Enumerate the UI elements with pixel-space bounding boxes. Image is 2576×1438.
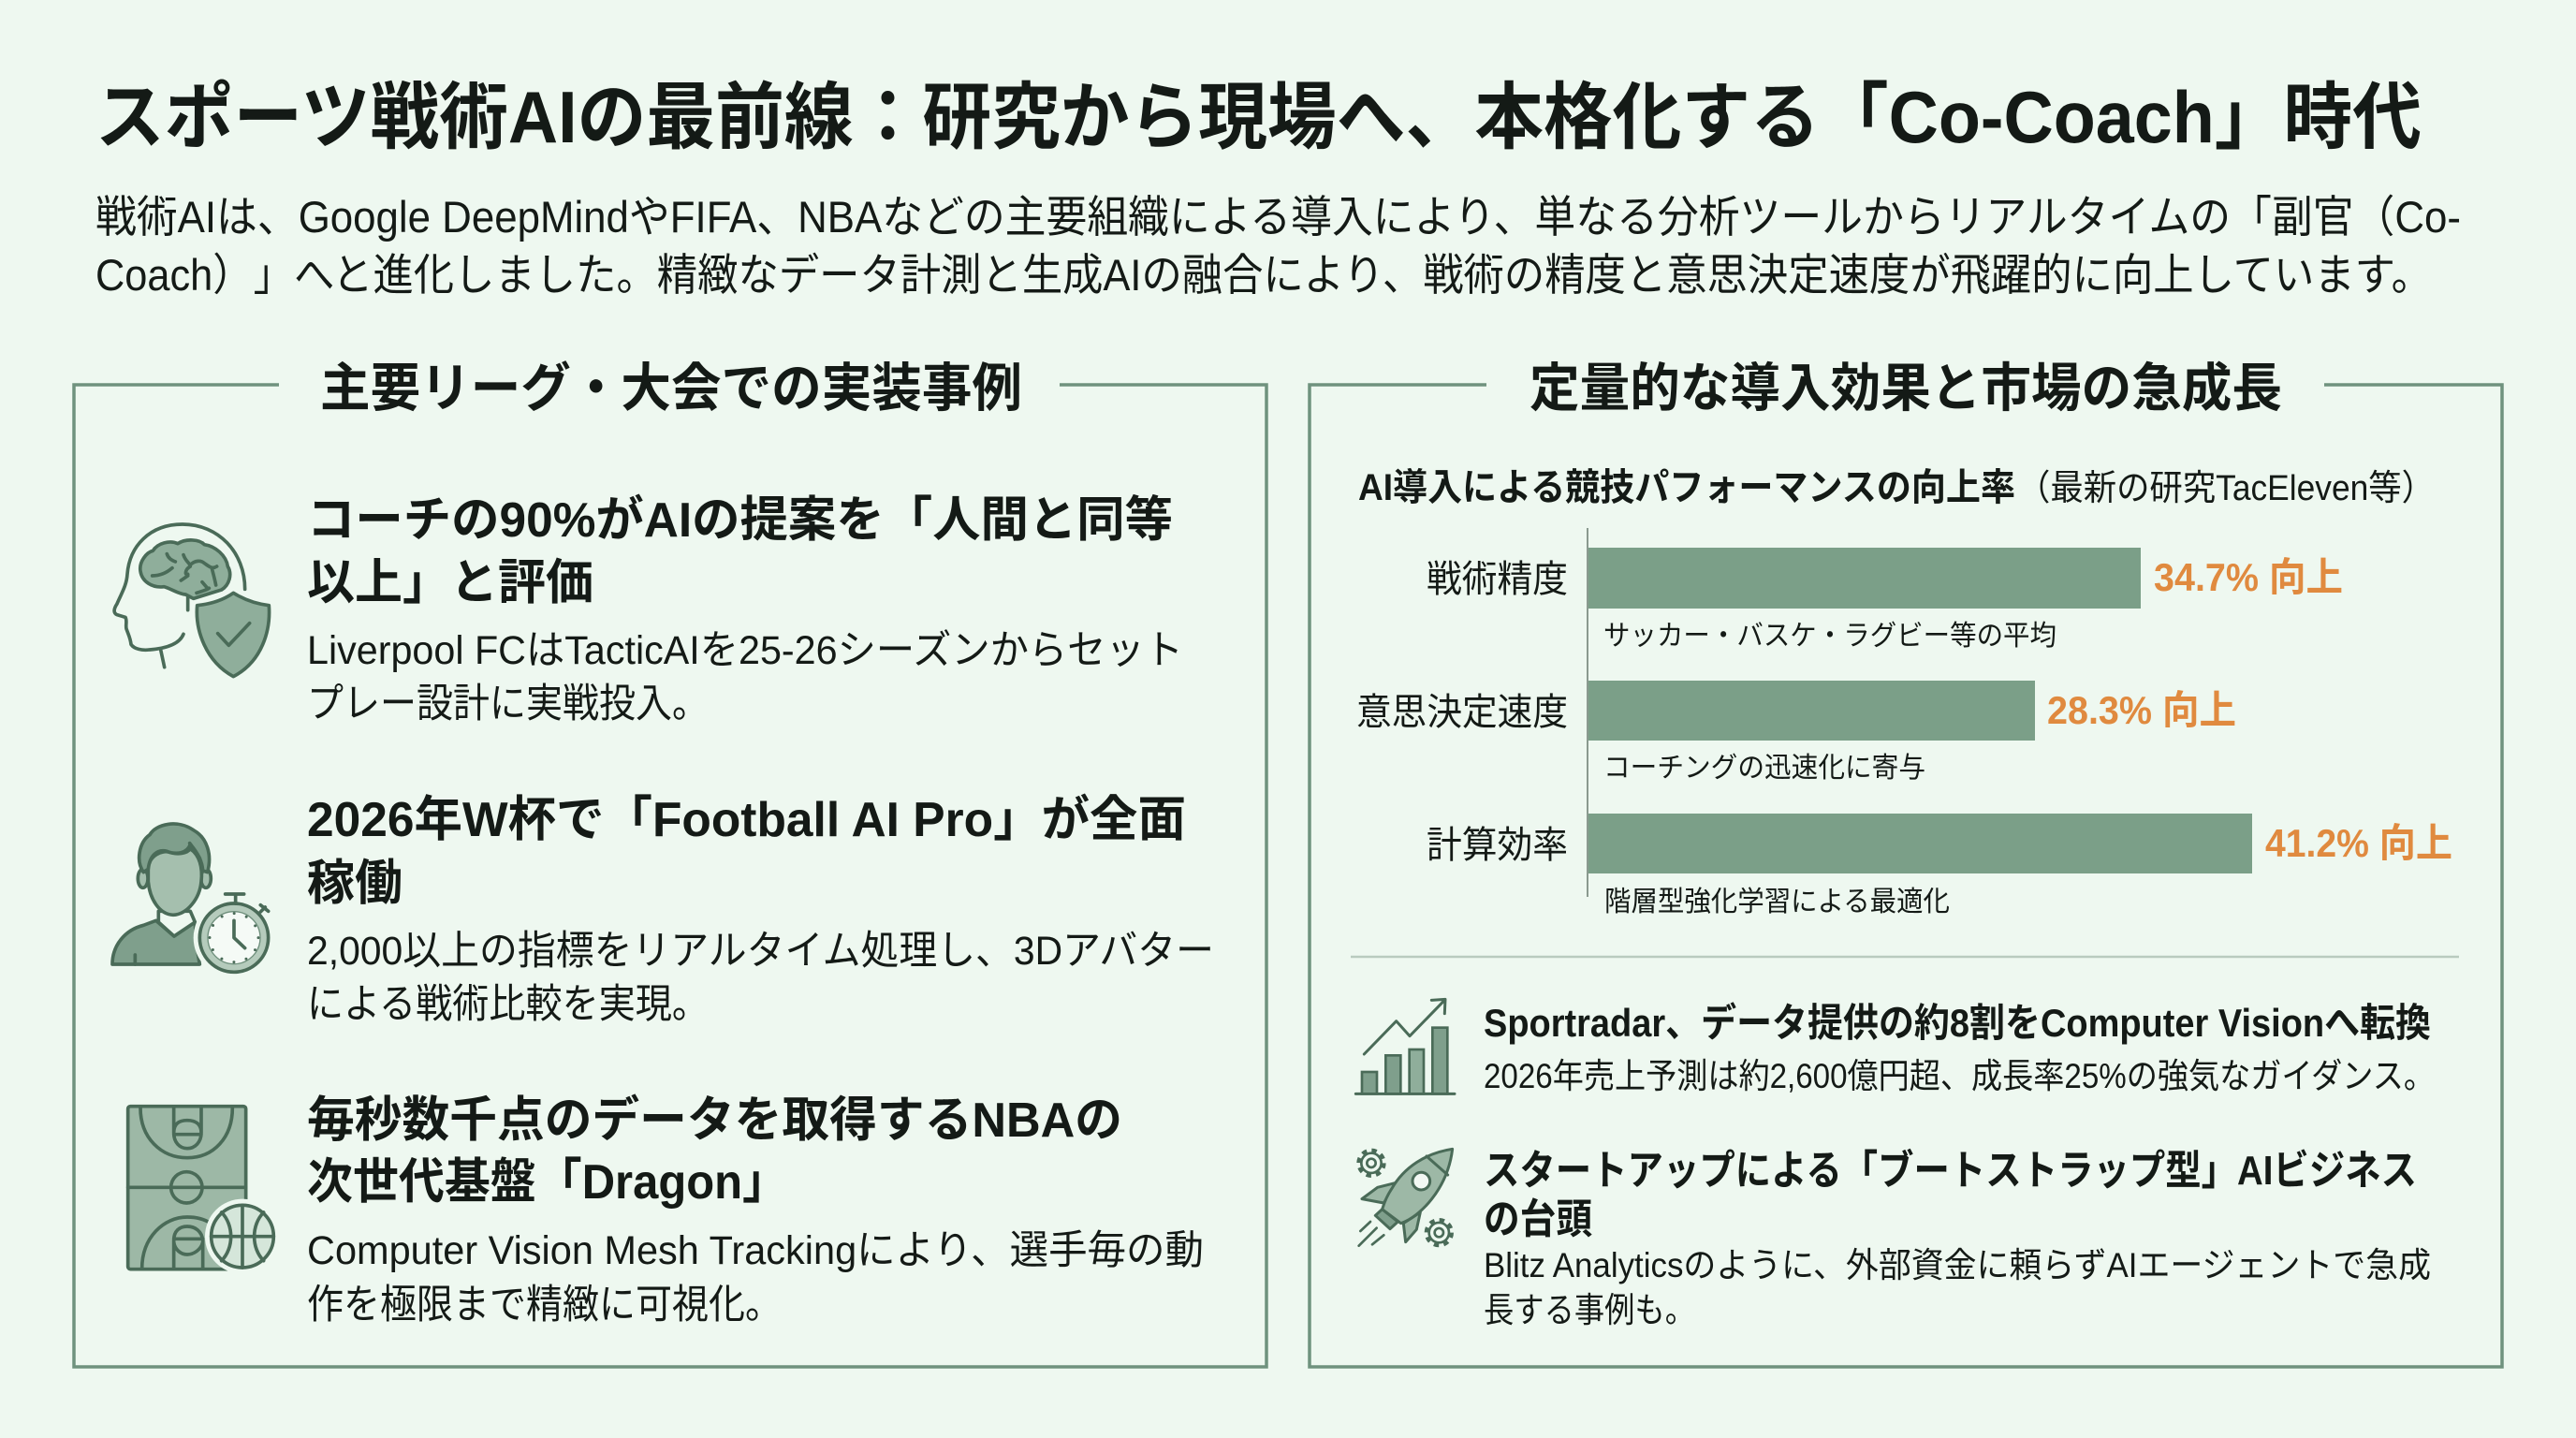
bar: tactical accuracy: 34.7% 向上	[2154, 555, 2343, 599]
text: startups: 長する事例も。	[1484, 1291, 1695, 1329]
bar: decision speed: コーチングの迅速化に寄与	[1603, 753, 1925, 784]
item body: プレー設計に実戦投入。	[307, 682, 709, 726]
intro text block	[95, 192, 2461, 300]
intro text block: Coach）」へと進化しました。精緻なデータ計測と生成AIの融合により、戦術の精度と意思決定速度が飛躍的に向上しています。	[95, 250, 2432, 300]
item: coaches evaluation	[114, 493, 1183, 726]
icon: brain and shield	[114, 524, 270, 677]
panel: quantitative effects	[1310, 359, 2502, 1367]
item body: Computer Vision Mesh Trackingにより、選手毎の動	[307, 1228, 1204, 1273]
panel heading: league implementations: 主要リーグ・大会での実装事例	[320, 359, 1022, 418]
chart title: （最新の研究TacEleven等）	[2017, 469, 2435, 508]
item heading: コーチの90%がAIの提案を「人間と同等	[307, 493, 1173, 548]
item body	[307, 628, 1183, 726]
item: Sportradar	[1355, 999, 2435, 1095]
item heading: 稼働	[307, 857, 402, 911]
panel heading: quantitative effects: 定量的な導入効果と市場の急成長	[1530, 359, 2282, 418]
chart title: AI導入による競技パフォーマンスの向上率	[1358, 467, 2015, 508]
bar: tactical accuracy: サッカー・バスケ・ラグビー等の平均	[1603, 621, 2056, 652]
item heading	[307, 793, 1186, 911]
intro text block: 戦術AIは、Google DeepMindやFIFA、NBAなどの主要組織による導入により、単なる分析ツールからリアルタイムの「副官（Co-	[95, 192, 2461, 242]
item heading	[307, 493, 1173, 610]
item heading	[307, 1093, 1122, 1210]
text: startups: Blitz Analyticsのように、外部資金に頼らずAIエージェントで急成	[1484, 1246, 2431, 1284]
icon: growth chart	[1355, 999, 1455, 1093]
item: NBA Dragon	[128, 1093, 1204, 1328]
item body: Liverpool FCはTacticAIを25-26シーズンからセット	[307, 628, 1183, 673]
text: startups	[1484, 1148, 2431, 1329]
icon: rocket and gears	[1359, 1149, 1453, 1246]
icon: basketball court and ball	[128, 1107, 280, 1274]
chart title	[1358, 467, 2435, 508]
item body: 作を極限まで精緻に可視化。	[307, 1283, 782, 1328]
item heading: 次世代基盤「Dragon」	[307, 1155, 788, 1210]
item heading: 毎秒数千点のデータを取得するNBAの	[307, 1093, 1122, 1148]
item: Football AI Pro	[112, 793, 1214, 1027]
item heading: 2026年W杯で「Football AI Pro」が全面	[307, 793, 1186, 847]
bar: decision speed: 28.3% 向上	[2047, 688, 2236, 732]
text: startups: スタートアップによる「ブートストラップ型」AIビジネス	[1484, 1148, 2417, 1194]
bar: decision speed: 意思決定速度	[1356, 692, 1568, 733]
bar: compute efficiency: 41.2% 向上	[2265, 821, 2452, 865]
bar: compute efficiency: 計算効率	[1427, 825, 1568, 866]
item body	[307, 1228, 1204, 1328]
text: startups: の台頭	[1484, 1196, 1592, 1242]
item body: 2,000以上の指標をリアルタイム処理し、3Dアバター	[307, 929, 1214, 974]
item: startups	[1359, 1148, 2431, 1329]
icon: person and stopwatch	[112, 824, 274, 978]
item body: による戦術比較を実現。	[307, 982, 709, 1027]
panel: league implementations	[74, 359, 1266, 1367]
bar: tactical accuracy: 戦術精度	[1427, 559, 1568, 600]
text: Sportradar: 2026年売上予測は約2,600億円超、成長率25%の強気なガイダンス。	[1484, 1057, 2435, 1095]
text: Sportradar: Sportradar、データ提供の約8割をComputer Visionへ転換	[1484, 1001, 2431, 1045]
bar: compute efficiency	[1427, 814, 2452, 917]
item heading: 以上」と評価	[307, 556, 593, 610]
bar chart	[1356, 528, 2452, 917]
text: Sportradar	[1484, 1001, 2435, 1095]
bar: decision speed	[1356, 681, 2236, 784]
title: スポーツ戦術AIの最前線：研究から現場へ、本格化する「Co-Coach」時代	[95, 76, 2422, 158]
bar: tactical accuracy	[1427, 548, 2343, 652]
bar: compute efficiency: 階層型強化学習による最適化	[1604, 887, 1950, 917]
item body	[307, 929, 1214, 1027]
